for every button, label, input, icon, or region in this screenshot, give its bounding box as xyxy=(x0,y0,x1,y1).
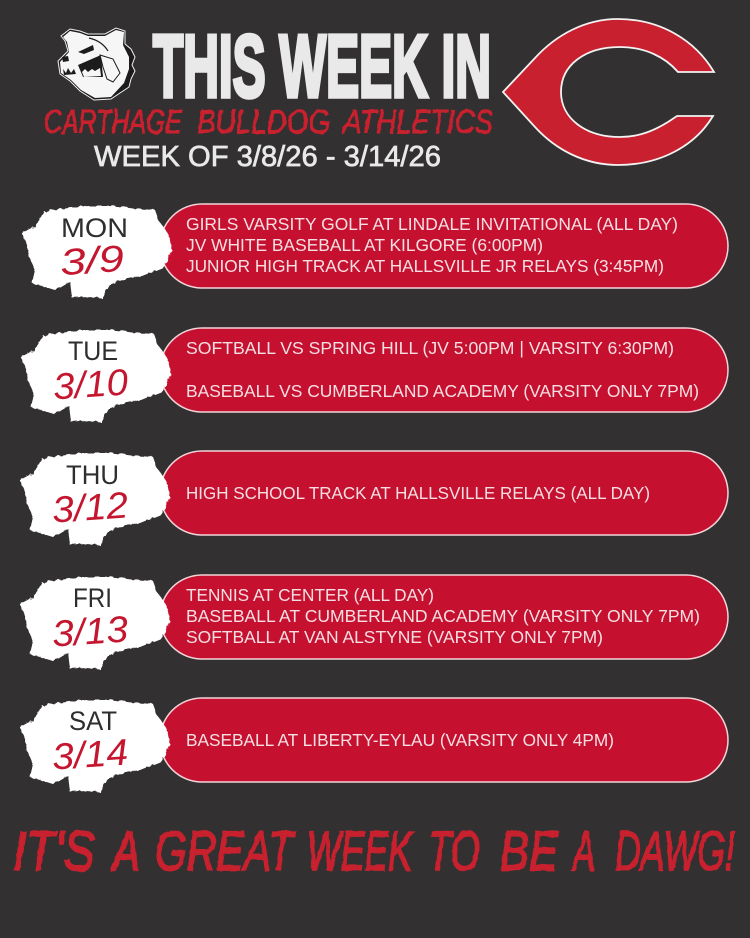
title: this week in: THIS WEEK IN xyxy=(153,16,491,116)
events: monday xyxy=(186,214,678,276)
icon: bulldog mascot xyxy=(58,28,135,100)
day label: tue: TUE xyxy=(68,336,118,366)
date: 3/10: 3/10 xyxy=(52,361,130,408)
day badge: friday xyxy=(20,577,170,669)
event pill: monday xyxy=(160,204,728,288)
events: tuesday xyxy=(186,338,699,401)
events: tuesday: SOFTBALL VS SPRING HILL (JV 5:00PM | VARSITY 6:30PM) xyxy=(186,338,674,358)
day badge: thursday xyxy=(20,453,170,545)
event pill: tuesday xyxy=(160,328,728,412)
row: friday xyxy=(20,575,728,669)
event pill: thursday xyxy=(160,451,728,535)
events: friday xyxy=(186,585,700,647)
day label: sat: SAT xyxy=(69,706,117,736)
date: 3/12: 3/12 xyxy=(51,484,130,531)
events: monday: JUNIOR HIGH TRACK AT HALLSVILLE JR RELAYS (3:45PM) xyxy=(186,256,664,276)
events: friday: BASEBALL AT CUMBERLAND ACADEMY (VARSITY ONLY 7PM) xyxy=(186,606,700,626)
date: 3/13: 3/13 xyxy=(51,608,130,655)
date: 3/14: 3/14 xyxy=(51,731,129,778)
row: tuesday xyxy=(21,328,728,422)
subtitle: carthage bulldog athletics: CARTHAGE xyxy=(44,103,183,140)
events: thursday: HIGH SCHOOL TRACK AT HALLSVILLE RELAYS (ALL DAY) xyxy=(186,483,650,503)
events: saturday: BASEBALL AT LIBERTY-EYLAU (VARSITY ONLY 4PM) xyxy=(186,730,614,750)
tagline: IT'S xyxy=(13,819,95,882)
day label: mon: MON xyxy=(61,213,128,243)
event pill: saturday xyxy=(160,698,728,782)
tagline: TO xyxy=(428,819,480,882)
tagline: A xyxy=(571,819,595,882)
day label: thu: THU xyxy=(66,460,119,490)
day label: fri: FRI xyxy=(73,583,112,613)
subtitle: carthage bulldog athletics: ATHLETICS xyxy=(341,103,493,140)
event pill: friday xyxy=(160,575,728,659)
events: monday: GIRLS VARSITY GOLF AT LINDALE INVITATIONAL (ALL DAY) xyxy=(186,214,678,234)
tagline xyxy=(13,819,735,882)
subtitle: carthage bulldog athletics xyxy=(44,103,493,140)
day badge: saturday xyxy=(20,700,170,792)
subtitle: carthage bulldog athletics: BULLDOG xyxy=(197,103,330,140)
events: tuesday: BASEBALL VS CUMBERLAND ACADEMY (VARSITY ONLY 7PM) xyxy=(186,381,699,401)
day badge: tuesday xyxy=(21,330,171,422)
events: monday: JV WHITE BASEBALL AT KILGORE (6:00PM) xyxy=(186,235,543,255)
day badge: monday xyxy=(22,206,172,298)
date: 3/9: 3/9 xyxy=(59,238,125,283)
tagline: A xyxy=(111,819,140,882)
logo: red C xyxy=(503,19,714,165)
events: friday: SOFTBALL AT VAN ALSTYNE (VARSITY ONLY 7PM) xyxy=(186,627,603,647)
row: saturday xyxy=(20,698,728,792)
tagline: GREAT xyxy=(155,819,296,882)
date range: WEEK OF 3/8/26 - 3/14/26 xyxy=(94,141,441,173)
tagline: WEEK xyxy=(307,819,414,882)
tagline: BE xyxy=(500,819,559,882)
row: thursday xyxy=(20,451,728,545)
events: friday: TENNIS AT CENTER (ALL DAY) xyxy=(186,585,434,605)
row: monday xyxy=(22,204,728,298)
